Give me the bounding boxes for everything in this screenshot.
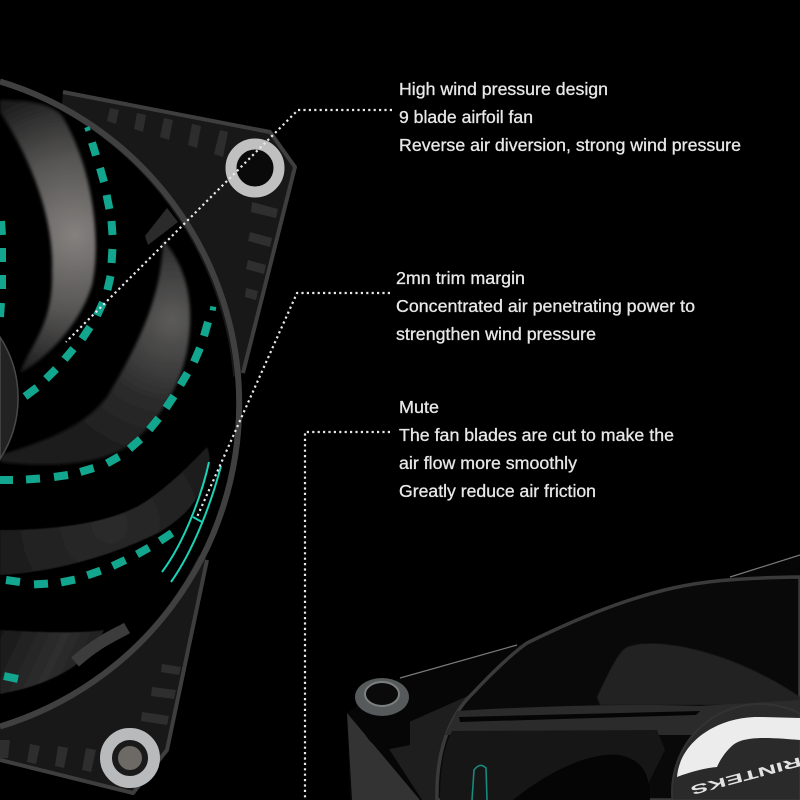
lower opening [440,730,665,800]
text block: mute: Mute [399,397,439,417]
frame top face [380,695,470,800]
text block: mute: air flow more smoothly [399,453,577,473]
text block: mute [399,397,674,501]
callout: trim margin leader [197,293,390,517]
upper blade [597,644,800,705]
center hub [0,337,18,459]
horizontal strut [445,700,800,735]
blade 3 [0,447,209,575]
text block: high wind pressure design: 9 blade airfoil fan [399,107,533,127]
strut slot [459,711,700,722]
fan opening [437,577,800,800]
frame body [347,555,800,800]
bottom washer [106,734,154,782]
text block: trim margin: Concentrated air penetrating power to [396,296,695,316]
frame top edge [400,555,800,678]
blade 2 [0,240,190,465]
outer ring [0,82,239,726]
text block: trim margin [396,268,695,344]
lower blade [513,755,650,800]
small teal loop [472,765,487,800]
text block: high wind pressure design [399,79,741,155]
callout: high wind pressure leader [66,110,392,342]
top washer [231,144,279,192]
text block: trim margin: strengthen wind pressure [396,324,596,344]
fan frame: bottom right corner [0,540,207,793]
left fan [0,82,295,793]
text block: trim margin: 2mn trim margin [396,268,525,288]
blade 4 [0,630,104,694]
teal airflow dashes [0,128,216,679]
washer inner bolt [118,746,142,770]
hub label [677,717,800,777]
fan frame: top right corner [60,92,295,380]
text block: high wind pressure design: High wind pressure design [399,79,608,99]
fan housing interior [0,84,234,726]
blade 1 [0,100,96,373]
second fan, lower right [347,555,800,800]
hub [672,704,800,800]
screw post [355,678,410,750]
teal trim margin marker [162,462,221,582]
text block: mute: The fan blades are cut to make the [399,425,674,445]
frame side wall [347,713,420,800]
blades [0,100,209,694]
text block: mute: Greatly reduce air friction [399,481,596,501]
callout: mute leader [305,432,390,799]
text block: high wind pressure design: Reverse air diversion, strong wind pressure [399,135,741,155]
